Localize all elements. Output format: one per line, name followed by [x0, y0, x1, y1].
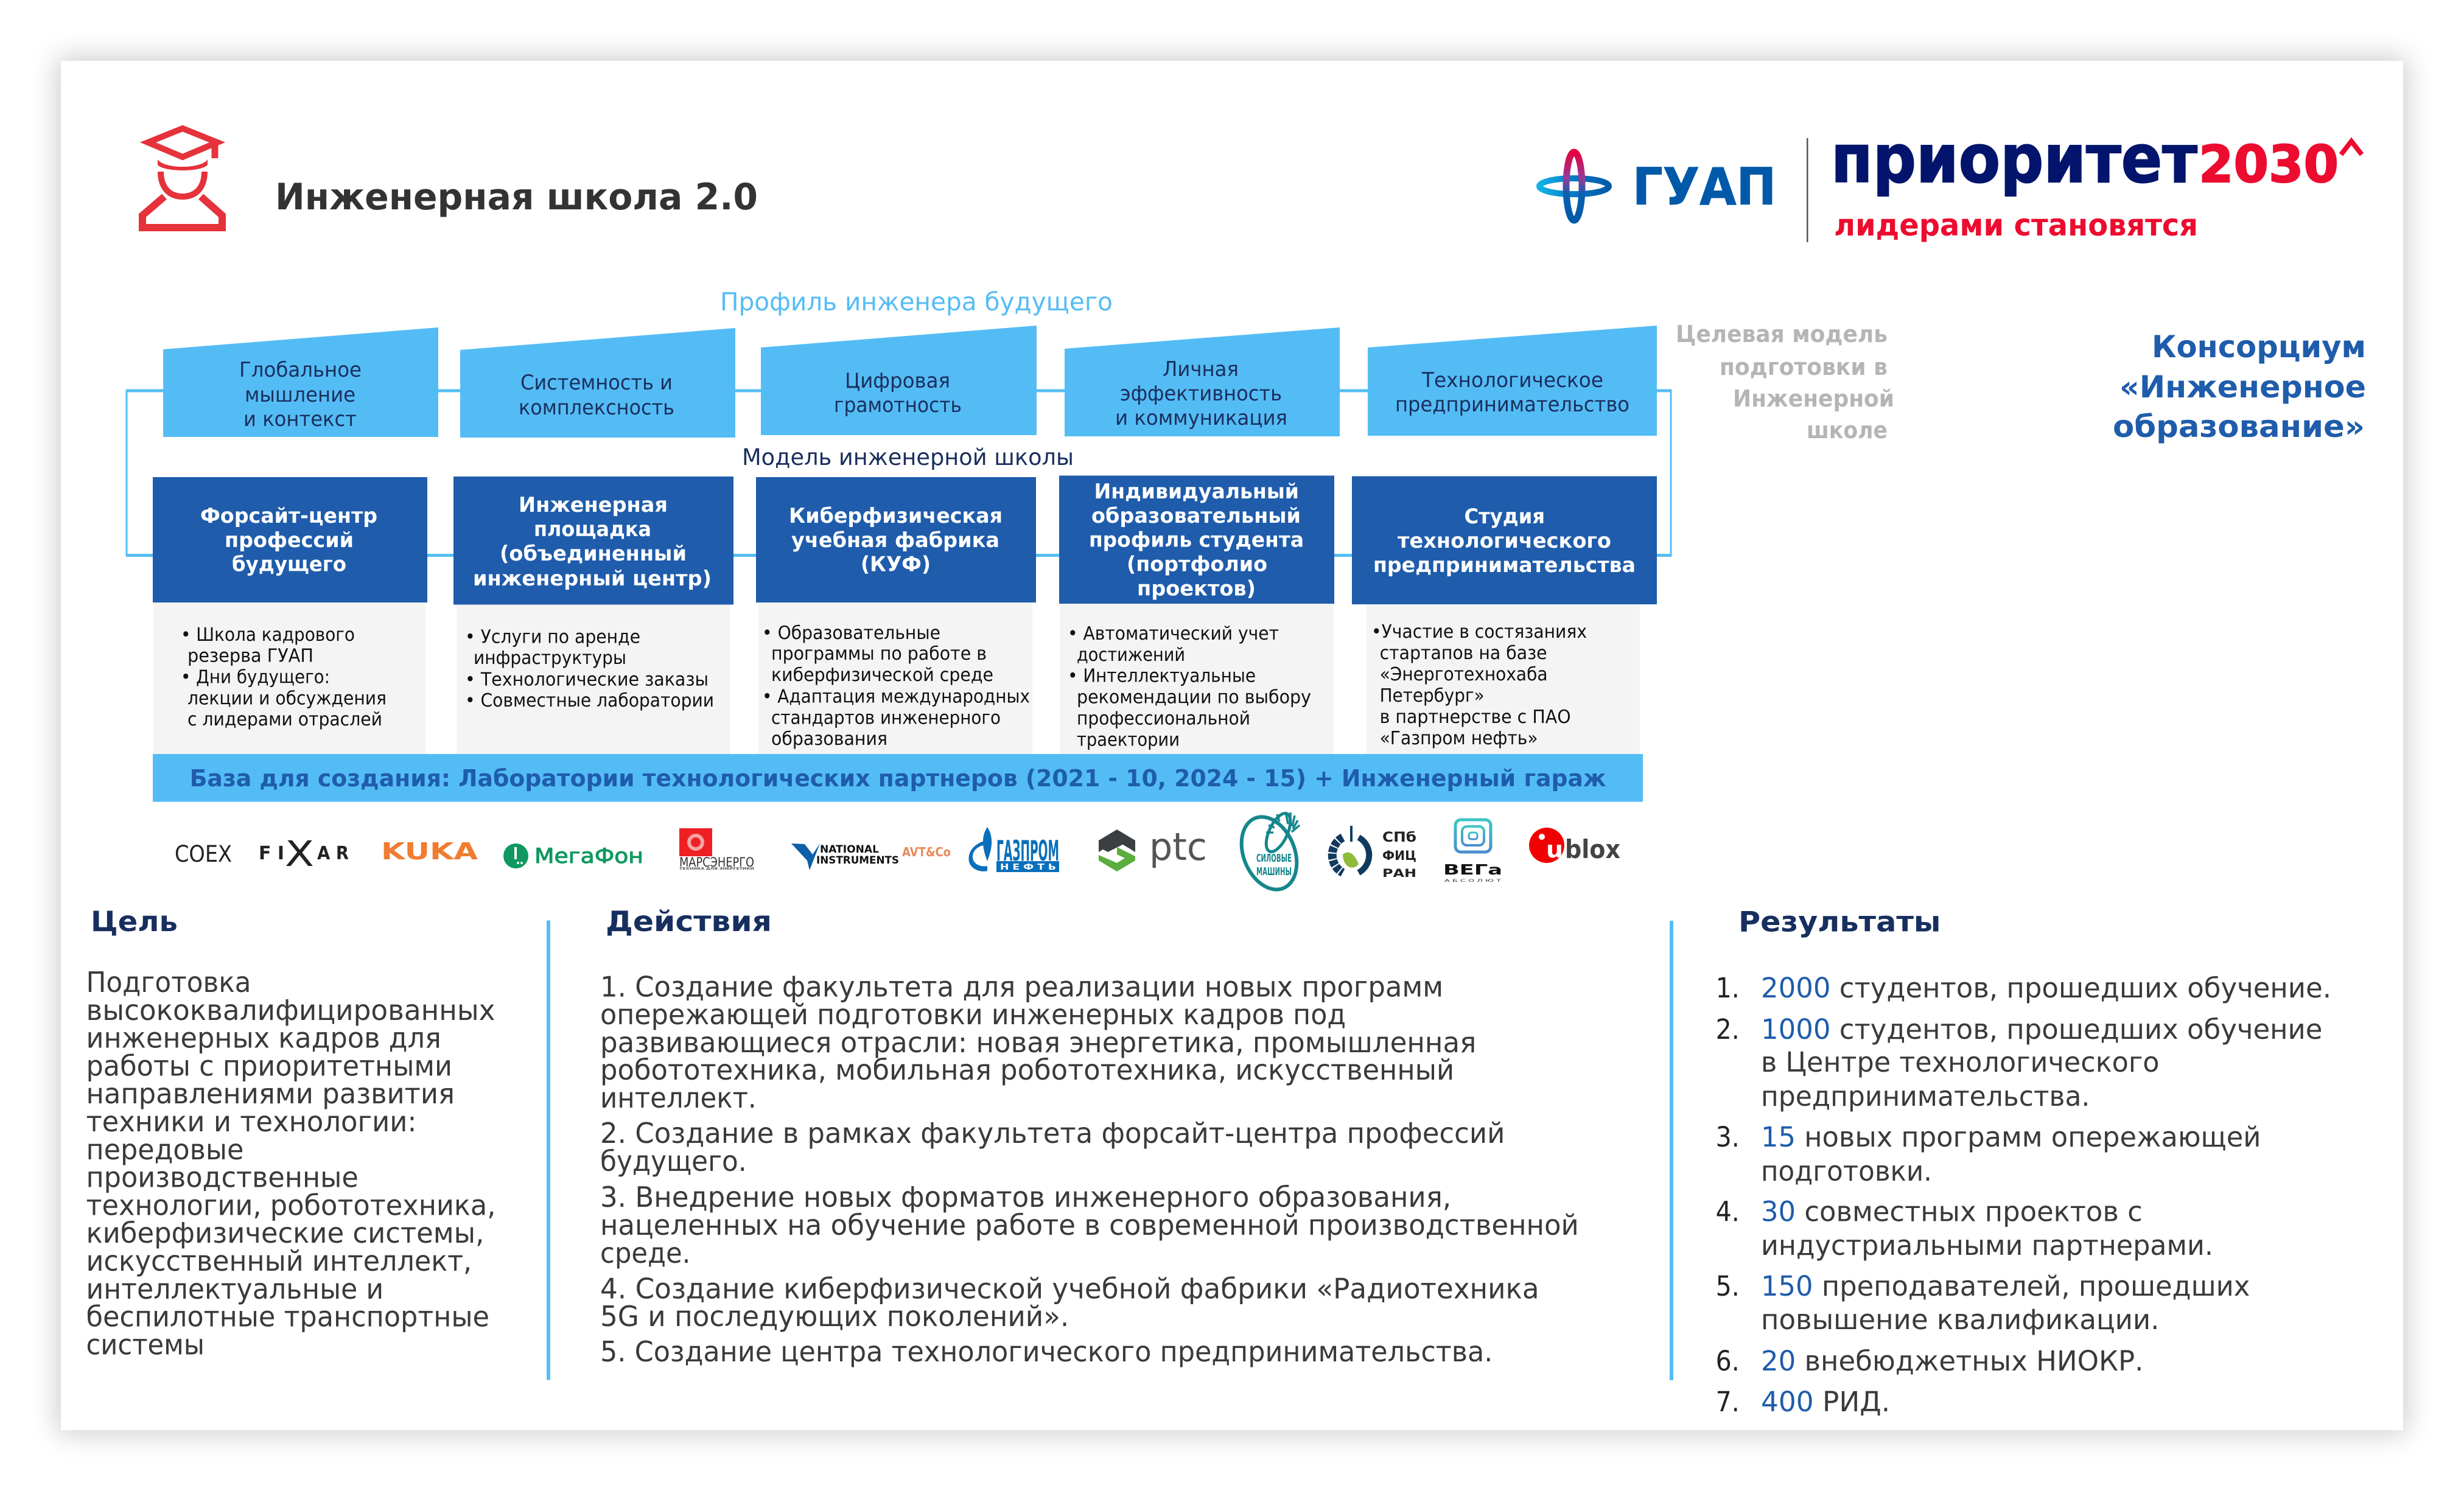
detail: entrepreneurship studio: •Участие в состязаниях — [1371, 621, 1587, 643]
panel: profile competencies — [163, 326, 1657, 438]
block: cyber-physical factory: (КУФ) — [861, 553, 931, 577]
logo: COEX: COEX — [175, 841, 232, 867]
detail: engineering site: • Технологические заказы — [465, 669, 709, 690]
logo: FIXAR: X — [285, 833, 314, 875]
detail: cyber-physical factory — [758, 602, 1032, 755]
block: foresight centre: Форсайт-центр — [200, 504, 377, 528]
heading: actions: Действия — [606, 905, 772, 938]
text: goal body: технологии, робототехника, — [86, 1189, 496, 1221]
panel: target model caption: Инженерной — [1733, 385, 1894, 412]
detail: foresight centre: • Школа кадрового — [181, 624, 355, 646]
text: results list: предпринимательства. — [1761, 1080, 2090, 1112]
detail: student profile: • Интеллектуальные — [1068, 666, 1256, 687]
logo: AVT&Co: AVT&Co — [902, 845, 951, 859]
text: actions list — [600, 971, 1579, 1368]
logo: Gazprom Neft: Н Е Ф Т Ь — [1000, 863, 1056, 872]
detail: foresight centre: резерва ГУАП — [187, 645, 313, 667]
text: goal body: высококвалифицированных — [86, 994, 495, 1027]
text: goal body — [86, 966, 496, 1361]
text: goal body: направлениями развития — [86, 1077, 455, 1110]
heading: results: Результаты — [1738, 906, 1941, 938]
logo: Marsenergo: ТЕХНИКА ДЛЯ ЭНЕРГЕТИКИ — [679, 867, 754, 871]
partner logos: ГАЗПРОМ — [996, 834, 1059, 867]
logo: Silovye Mashiny: СИЛОВЫЕ — [1256, 852, 1292, 865]
block: entrepreneurship studio: предпринимательства — [1373, 553, 1636, 578]
text: results list: 7. — [1716, 1386, 1740, 1418]
logo divider — [1807, 138, 1808, 242]
text: results list: 3. — [1716, 1121, 1740, 1153]
block: individual profile — [1059, 476, 1334, 604]
logo: GUAP: ГУАП — [1633, 157, 1776, 217]
competency: global thinking: Глобальное — [239, 358, 362, 382]
detail: cyber-physical factory: • Образовательные — [762, 623, 940, 644]
block: engineering site — [453, 477, 733, 605]
text: actions list: 5. Создание центра технологического предпринимательства. — [600, 1335, 1493, 1368]
detail: entrepreneurship studio: в партнерстве с ПАО — [1380, 707, 1571, 728]
text: goal body: передовые — [86, 1133, 243, 1166]
text: results list: повышение квалификации. — [1761, 1304, 2160, 1336]
partner logos — [175, 809, 1620, 898]
text: actions list: 1. Создание факультета для реализации новых программ — [600, 971, 1443, 1003]
text: goal body: производственные — [86, 1161, 359, 1194]
logo: SPb FRC RAS: ФИЦ — [1382, 848, 1416, 863]
competency: digital literacy — [761, 326, 1037, 435]
banner: base for creation: База для создания: Лаборатории технологических партнеров (2021 - 10, 2024 - 15) + Инженерный гараж — [190, 765, 1606, 792]
block: entrepreneurship studio: Студия — [1465, 505, 1545, 529]
text: results list: 20 внебюджетных НИОКР. — [1761, 1345, 2143, 1377]
text: results list: 2000 студентов, прошедших обучение. — [1761, 972, 2331, 1004]
detail: student profile: траектории — [1077, 730, 1180, 751]
logo: u-blox: u — [1546, 836, 1563, 863]
block: engineering site: инженерный центр) — [473, 567, 712, 591]
logo: SPb FRC RAS — [1332, 826, 1416, 880]
competency: digital literacy: грамотность — [834, 393, 962, 417]
competency: global thinking: мышление — [245, 383, 355, 407]
text: results list: 15 новых программ опережающей — [1761, 1121, 2261, 1153]
detail: student profile: профессиональной — [1077, 708, 1250, 730]
competency: global thinking — [163, 327, 438, 437]
logo: PTC — [1099, 825, 1207, 871]
text: results list: 1000 студентов, прошедших обучение — [1761, 1013, 2322, 1046]
block: engineering site: Инженерная — [519, 493, 668, 517]
block: entrepreneurship studio: технологического — [1398, 529, 1611, 553]
logo: Priority 2030 — [1831, 120, 2362, 243]
text: results list: 4. — [1716, 1196, 1740, 1227]
detail: entrepreneurship studio: Петербург» — [1380, 685, 1485, 707]
detail: cyber-physical factory: стандартов инженерного — [771, 708, 1001, 729]
detail: entrepreneurship studio: «Энерготехнохаба — [1380, 664, 1548, 685]
text: results list: 150 преподавателей, прошедших — [1761, 1270, 2250, 1302]
competency: global thinking: и контекст — [243, 407, 357, 431]
banner: base for creation — [153, 754, 1643, 802]
detail: foresight centre: с лидерами отраслей — [187, 709, 382, 730]
column: actions — [600, 905, 1579, 1368]
competency: systems thinking — [460, 328, 735, 438]
detail: cyber-physical factory: • Адаптация международных — [762, 686, 1030, 708]
detail: foresight centre: лекции и обсуждения — [187, 688, 387, 710]
text: actions list: 5G и последующих поколений». — [600, 1300, 1069, 1333]
heading: goal: Цель — [91, 905, 178, 938]
detail: entrepreneurship studio — [1367, 604, 1640, 755]
block: engineering site: площадка — [534, 517, 651, 542]
block: individual profile: (портфолио — [1127, 553, 1267, 577]
logo: u-blox: blox — [1565, 834, 1620, 864]
competency: entrepreneurship: предпринимательство — [1395, 393, 1629, 417]
title: Инженерная школа 2.0 — [275, 176, 758, 218]
panel: consortium caption — [2113, 329, 2366, 444]
panel: consortium caption: «Инженерное — [2119, 369, 2366, 405]
logo: Silovye Mashiny: МАШИНЫ — [1256, 865, 1292, 878]
logo: SPb FRC RAS: РАН — [1382, 867, 1416, 880]
logo: Gazprom Neft — [969, 827, 1059, 872]
heading: school model: Модель инженерной школы — [742, 444, 1074, 470]
competency: entrepreneurship — [1368, 326, 1657, 436]
competency: entrepreneurship: Технологическое — [1421, 368, 1603, 393]
text: results list: в Центре технологического — [1761, 1046, 2160, 1078]
logo: Vega Absolute — [1443, 820, 1502, 883]
logo: PTC: ptc — [1149, 825, 1207, 869]
text: goal body: киберфизические системы, — [86, 1217, 484, 1249]
text: goal body: беспилотные транспортные — [86, 1301, 489, 1333]
logo: GUAP — [1539, 152, 1776, 220]
logo: Marsenergo — [679, 828, 754, 871]
detail: engineering site: • Услуги по аренде — [465, 626, 640, 648]
logo: Marsenergo: МАРСЭНЕРГО — [679, 855, 754, 870]
logo: MegaFon: МегаФон — [534, 844, 643, 868]
detail: cyber-physical factory: программы по работе в — [771, 643, 987, 665]
column divider — [547, 920, 550, 1380]
text: goal body: инженерных кадров для — [86, 1022, 441, 1055]
logo: FIXAR: A R — [317, 843, 349, 864]
logo: KUKA: KUKA — [381, 838, 478, 865]
block: foresight centre: профессий — [225, 528, 354, 553]
competency: systems thinking: Системность и — [520, 371, 673, 395]
panel: detail columns — [153, 602, 1640, 755]
panel: school model blocks — [153, 476, 1657, 605]
panel: target model caption — [1676, 321, 1894, 444]
competency: personal effectiveness: эффективность — [1120, 382, 1282, 406]
competency: digital literacy: Цифровая — [845, 369, 950, 393]
text: results list: 6. — [1716, 1345, 1740, 1377]
text: results list: 30 совместных проектов с — [1761, 1196, 2143, 1227]
text: results list: 2. — [1716, 1013, 1740, 1046]
text: goal body: искусственный интеллект, — [86, 1245, 472, 1277]
panel: consortium caption: Консорциум — [2152, 329, 2366, 365]
panel: target model caption: школе — [1807, 417, 1888, 444]
text: actions list: будущего. — [600, 1145, 747, 1178]
text: goal body: системы — [86, 1329, 205, 1361]
detail: engineering site: инфраструктуры — [474, 648, 626, 669]
logo: Silovye Mashiny — [1231, 809, 1307, 898]
logo: MegaFon — [503, 843, 643, 868]
competency: personal effectiveness: Личная — [1163, 357, 1239, 382]
connector frame — [127, 391, 1671, 555]
text: goal body: Подготовка — [86, 966, 251, 999]
detail: foresight centre: • Дни будущего: — [181, 667, 330, 688]
block: cyber-physical factory — [756, 477, 1036, 602]
competency: personal effectiveness — [1065, 327, 1340, 436]
detail: student profile — [1060, 604, 1334, 755]
logo: Priority 2030: приоритет — [1831, 120, 2197, 198]
column: results — [1716, 906, 2331, 1418]
block: foresight centre — [153, 477, 427, 602]
text: results list: 400 РИД. — [1761, 1386, 1890, 1418]
block: individual profile: образовательный — [1091, 504, 1301, 528]
logo: National Instruments: NATIONAL — [820, 843, 879, 856]
detail: entrepreneurship studio: стартапов на базе — [1380, 643, 1547, 664]
competency: personal effectiveness: и коммуникация — [1115, 406, 1287, 430]
detail: engineering site: • Совместные лаборатории — [465, 690, 714, 711]
logo: u-blox — [1529, 828, 1620, 864]
text: actions list: 4. Создание киберфизической учебной фабрики «Радиотехника — [600, 1273, 1539, 1305]
logo: Vega Absolute: А Б С О Л Ю Т — [1444, 879, 1502, 883]
logo: Priority 2030: лидерами становятся — [1834, 208, 2198, 243]
detail: cyber-physical factory: образования — [771, 728, 887, 750]
block: cyber-physical factory: учебная фабрика — [791, 528, 999, 553]
block: entrepreneurship studio — [1352, 476, 1657, 604]
logo: FIXAR — [259, 833, 349, 875]
panel: consortium caption: образование» — [2113, 409, 2365, 444]
block: individual profile: профиль студента — [1089, 528, 1304, 553]
text: actions list: 2. Создание в рамках факультета форсайт-центра профессий — [600, 1117, 1505, 1150]
block: individual profile: проектов) — [1137, 577, 1256, 601]
logo: National Instruments: INSTRUMENTS — [816, 854, 899, 867]
logo: SPb FRC RAS: СПб — [1382, 830, 1416, 845]
detail: student profile: достижений — [1077, 644, 1185, 666]
logo: FIXAR: F I — [259, 843, 284, 864]
text: actions list: робототехника, мобильная робототехника, искусственный — [600, 1053, 1454, 1086]
detail: cyber-physical factory: киберфизической среде — [771, 665, 993, 686]
text: results list: подготовки. — [1761, 1155, 1932, 1187]
panel: target model caption: Целевая модель — [1676, 321, 1888, 347]
detail: student profile: рекомендации по выбору — [1077, 687, 1311, 708]
competency: systems thinking: комплексность — [519, 396, 674, 420]
heading: engineer profile: Профиль инженера будущего — [720, 287, 1113, 316]
text: actions list: среде. — [600, 1237, 690, 1269]
text: goal body: техники и технологии: — [86, 1105, 417, 1138]
block: engineering site: (объединенный — [500, 542, 687, 566]
logo: Vega Absolute: ВЕГа — [1443, 862, 1502, 878]
text: results list: 1. — [1716, 972, 1740, 1004]
text: actions list: опережающей подготовки инженерных кадров под — [600, 998, 1346, 1031]
text: actions list: 3. Внедрение новых форматов инженерного образования, — [600, 1181, 1451, 1213]
logo: Priority 2030: 2030 — [2199, 134, 2339, 194]
block: foresight centre: будущего — [232, 553, 346, 577]
text: results list: индустриальными партнерами. — [1761, 1229, 2213, 1262]
detail: engineering site — [457, 604, 730, 755]
block: individual profile: Индивидуальный — [1094, 480, 1299, 504]
detail: foresight centre — [153, 602, 425, 755]
column divider — [1670, 921, 1673, 1380]
icon: graduate in cap — [142, 128, 222, 228]
text: results list: 5. — [1716, 1270, 1740, 1302]
text: actions list: нацеленных на обучение работе в современной производственной — [600, 1209, 1579, 1241]
text: goal body: интеллектуальные и — [86, 1273, 383, 1305]
text: goal body: работы с приоритетными — [86, 1050, 452, 1082]
text: actions list: развивающиеся отрасли: новая энергетика, промышленная — [600, 1026, 1476, 1059]
panel: target model caption: подготовки в — [1720, 354, 1888, 380]
block: cyber-physical factory: Киберфизическая — [789, 504, 1003, 528]
text: actions list: интеллект. — [600, 1081, 757, 1114]
detail: student profile: • Автоматический учет — [1068, 623, 1279, 644]
column: goal — [86, 905, 496, 1361]
detail: entrepreneurship studio: «Газпром нефть» — [1380, 728, 1538, 749]
logo: National Instruments — [791, 843, 899, 870]
text: results list — [1716, 972, 2331, 1418]
